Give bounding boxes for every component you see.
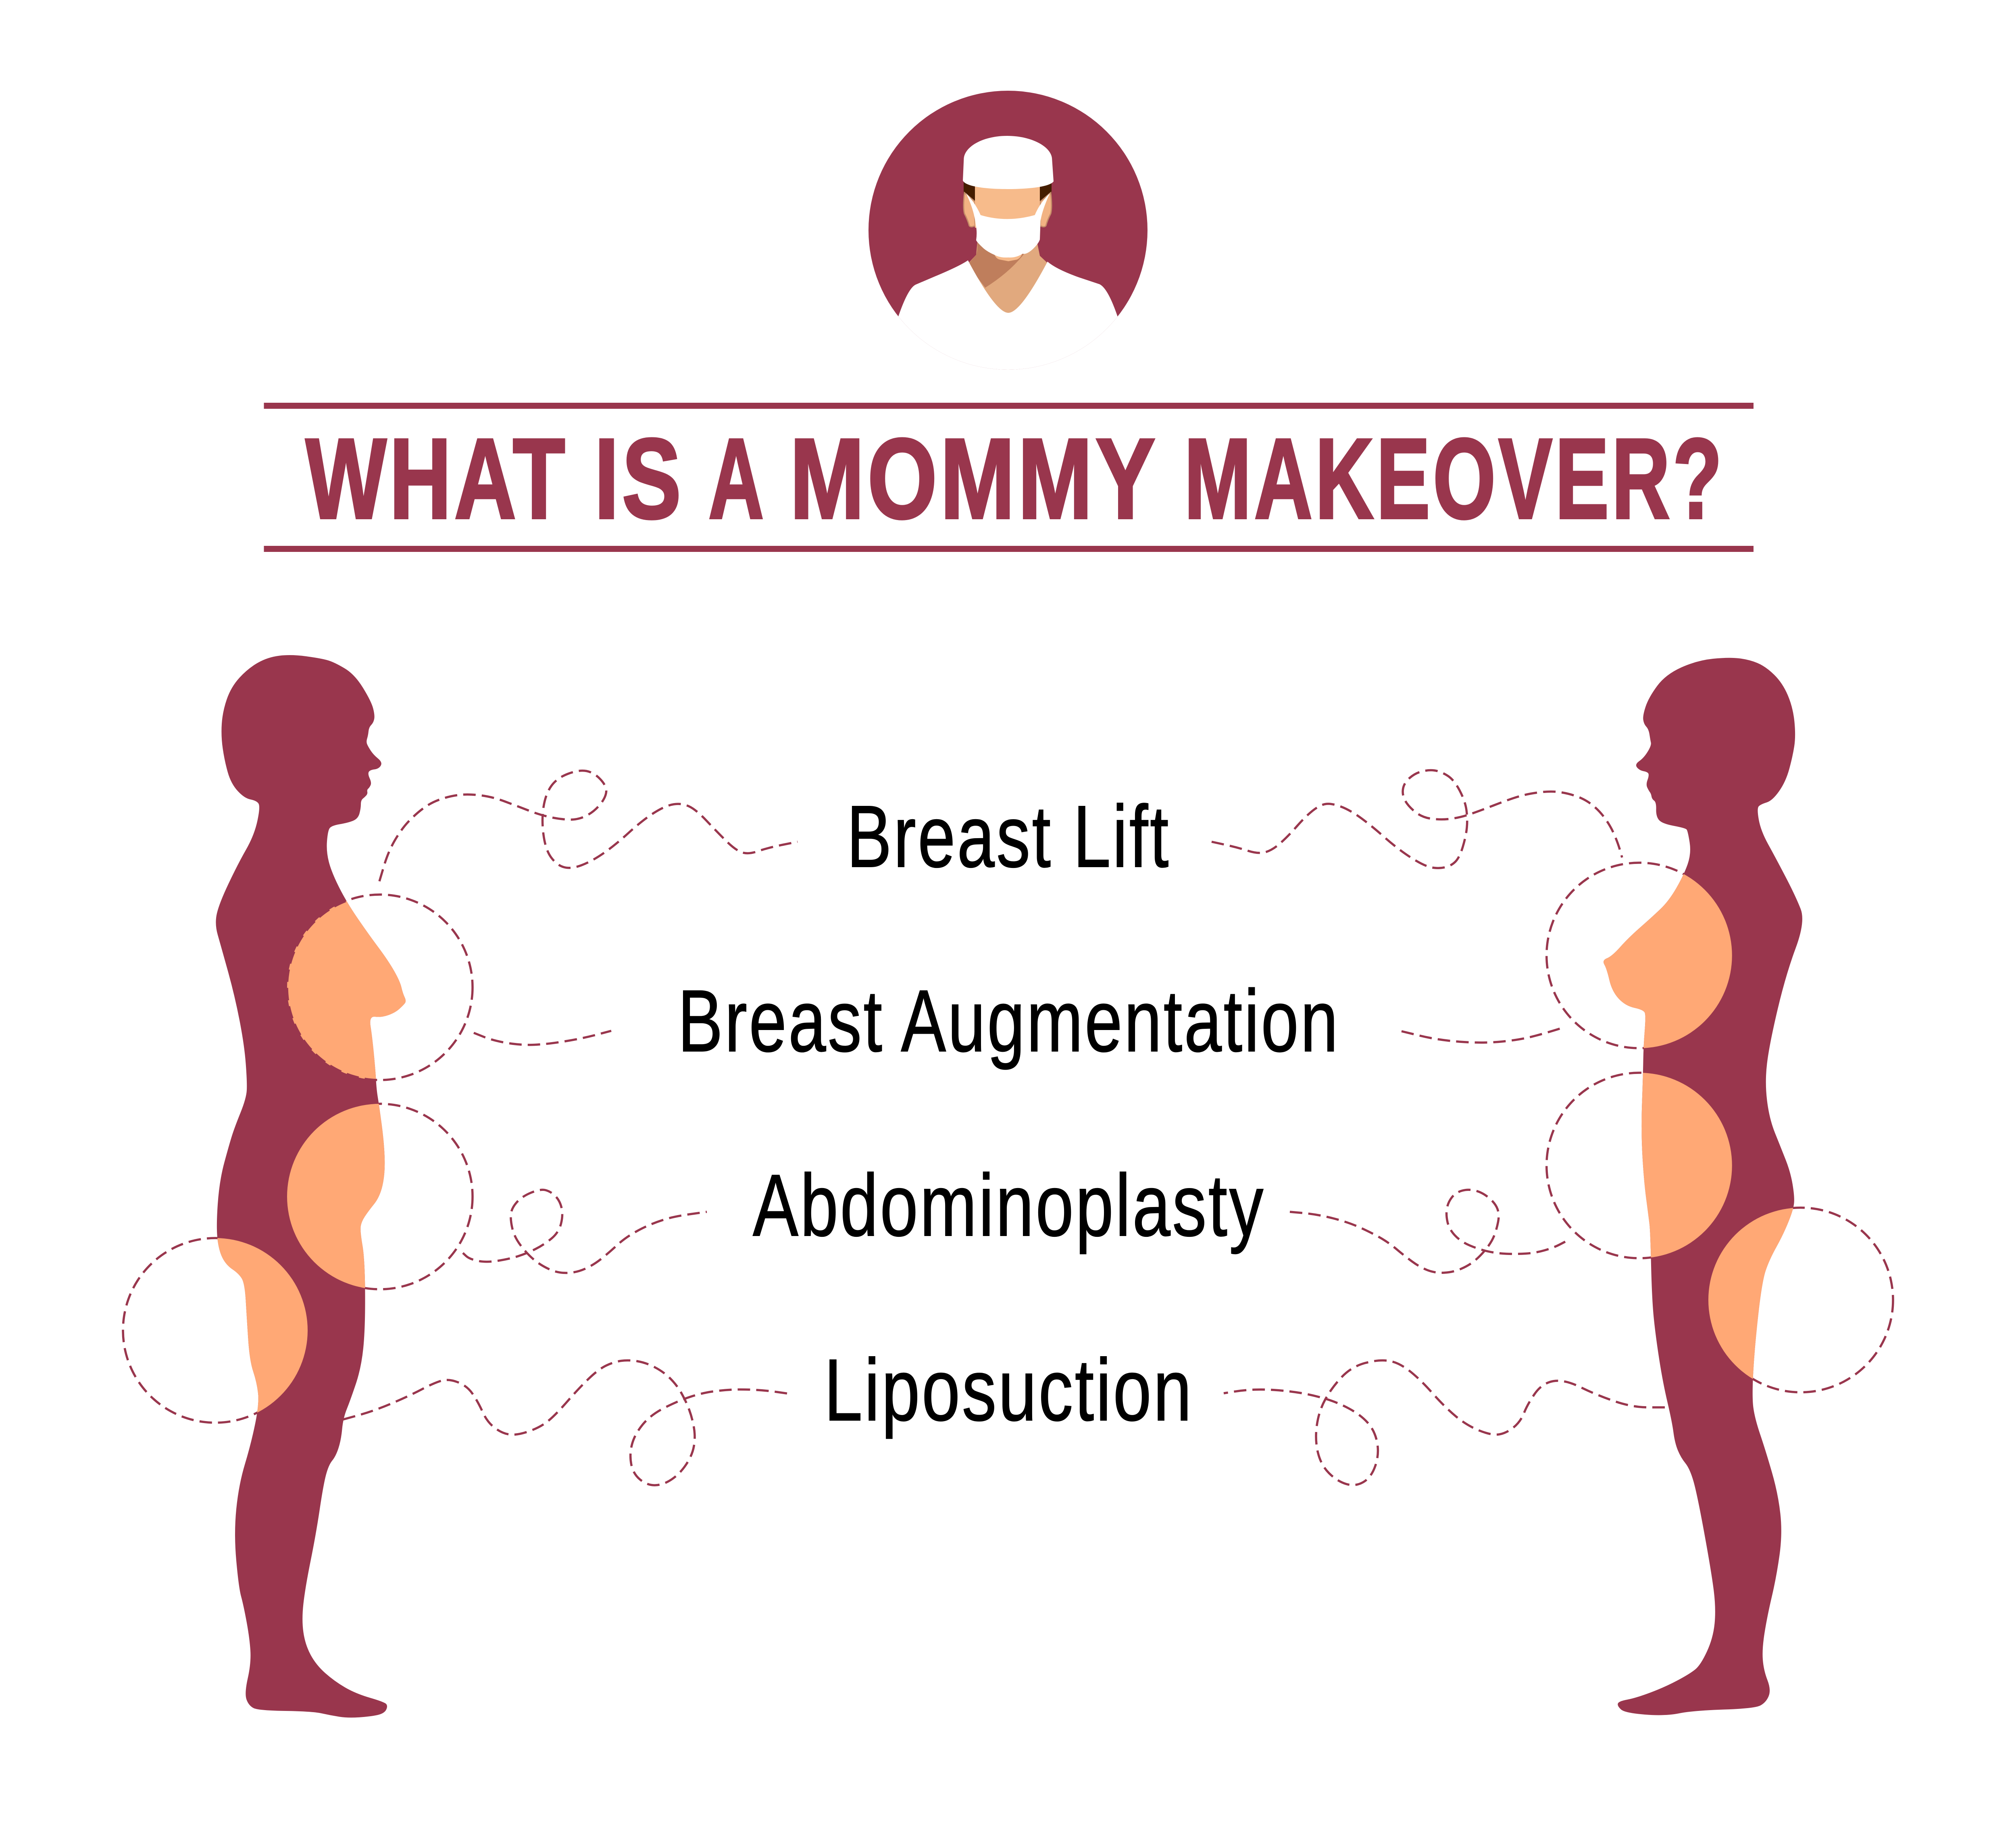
title: MOMMY <box>790 415 1158 542</box>
label: Liposuction: Liposuction <box>824 1341 1193 1439</box>
title: MAKEOVER? <box>1184 415 1725 542</box>
label: Abdominoplasty: Abdominoplasty <box>753 1157 1265 1255</box>
dashed circle: left hip <box>123 1238 308 1423</box>
neck shadow <box>968 242 1025 288</box>
title rule top <box>264 403 1754 409</box>
left body <box>216 655 406 1718</box>
right body <box>1604 658 1802 1715</box>
neck <box>969 242 1047 313</box>
connector: abdominoplasty left <box>463 1190 707 1273</box>
icon: surgeon avatar <box>868 91 1148 370</box>
face <box>975 183 1040 228</box>
title: A <box>708 415 766 542</box>
white coat <box>898 260 1118 403</box>
surgical cap <box>963 136 1054 189</box>
title: IS <box>594 415 684 542</box>
dashed circle: right abdomen <box>1547 1073 1732 1258</box>
chin <box>995 254 1022 261</box>
right silhouette with highlighted areas <box>1547 658 1893 1715</box>
label: Breast Lift: Breast Lift <box>847 788 1170 886</box>
connector: abdominoplasty right <box>1290 1190 1565 1273</box>
connector: liposuction left <box>343 1360 789 1485</box>
dashed circle: right chest <box>1547 863 1732 1048</box>
right treatment zones <box>1547 863 1893 1392</box>
dashed circle: right hip <box>1708 1208 1893 1392</box>
avatar background circle <box>868 91 1148 370</box>
right ear <box>1040 193 1052 227</box>
right breast zone <box>1547 863 1732 1048</box>
left treatment zones <box>123 895 473 1423</box>
title rule bottom <box>264 546 1754 552</box>
dashed circle: left abdomen <box>287 1104 473 1289</box>
label: Breast Augmentation: Breast Augmentation <box>678 972 1340 1070</box>
connector: breast lift right <box>1212 770 1622 868</box>
connector: breast augmentation left <box>474 1031 611 1045</box>
connector: breast augmentation right <box>1402 1027 1564 1043</box>
dashed circle: left chest <box>287 895 473 1080</box>
right abdomen zone <box>1547 1073 1732 1258</box>
left hip zone <box>123 1238 308 1423</box>
right hip zone <box>1708 1208 1893 1392</box>
left ear <box>964 193 975 227</box>
title <box>306 415 1725 542</box>
surgical mask <box>966 193 1050 258</box>
hair <box>964 182 1052 201</box>
left breast zone <box>287 895 473 1080</box>
left abdomen zone <box>287 1104 473 1289</box>
title: WHAT <box>306 415 568 542</box>
left silhouette with highlighted areas <box>123 655 473 1718</box>
connector: liposuction right <box>1224 1361 1665 1485</box>
connector: breast lift left <box>379 771 798 881</box>
surgeon figure <box>898 136 1118 370</box>
